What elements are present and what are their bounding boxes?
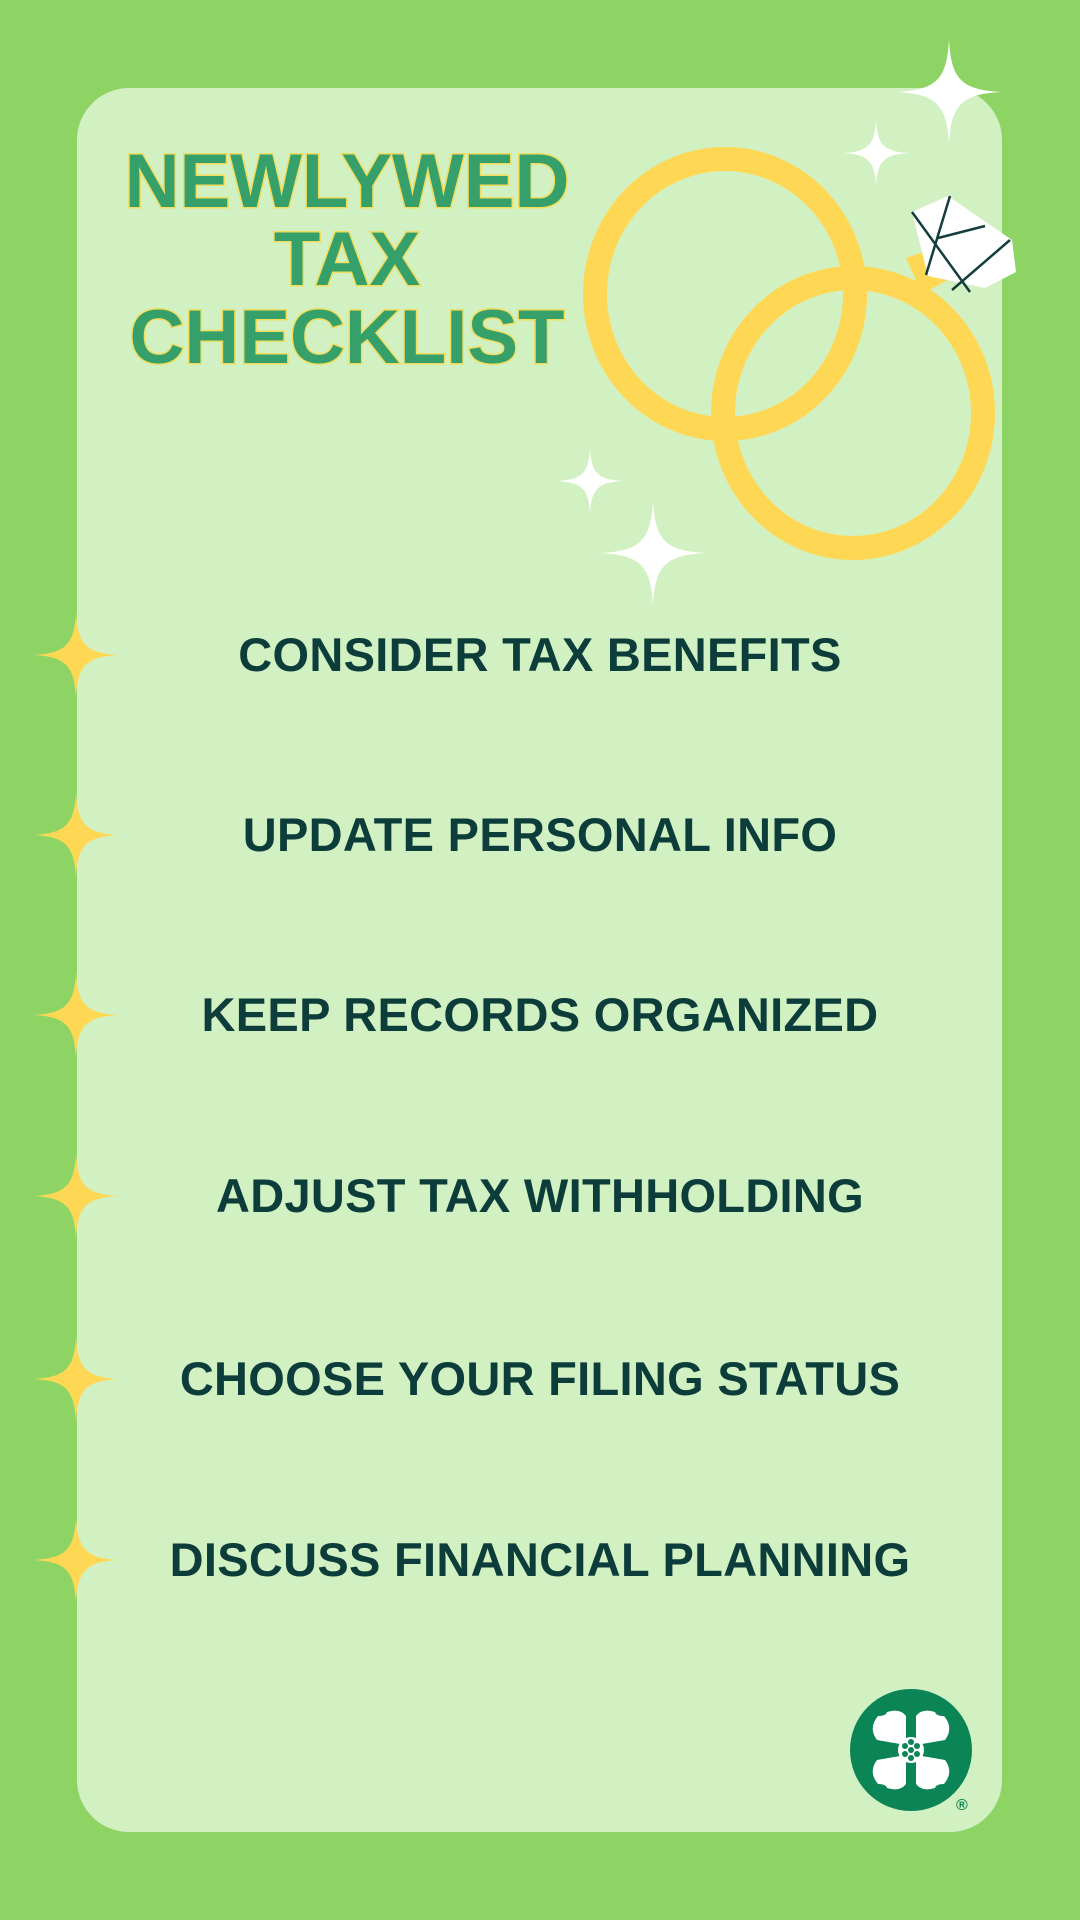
title: CHECKLIST [130, 295, 564, 380]
icon: ring right with diamond [723, 196, 1016, 548]
title: TAX [274, 217, 420, 302]
logo: ® [956, 1797, 968, 1814]
checklist item 6: DISCUSS FINANCIAL PLANNING [170, 1533, 910, 1586]
title: NEWLYWED [125, 139, 569, 224]
checklist item 1: CONSIDER TAX BENEFITS [238, 628, 842, 681]
icon: ring left [595, 159, 855, 429]
checklist item 5: CHOOSE YOUR FILING STATUS [180, 1352, 900, 1405]
checklist item 3: KEEP RECORDS ORGANIZED [202, 988, 878, 1041]
checklist item 2: UPDATE PERSONAL INFO [243, 808, 837, 861]
title [125, 139, 569, 380]
sparkles: yellow bullets [33, 612, 119, 1603]
sparkles: white [557, 40, 1002, 606]
checklist item 4: ADJUST TAX WITHHOLDING [216, 1169, 864, 1222]
logo [850, 1689, 972, 1814]
panel: background card [77, 88, 1002, 1832]
